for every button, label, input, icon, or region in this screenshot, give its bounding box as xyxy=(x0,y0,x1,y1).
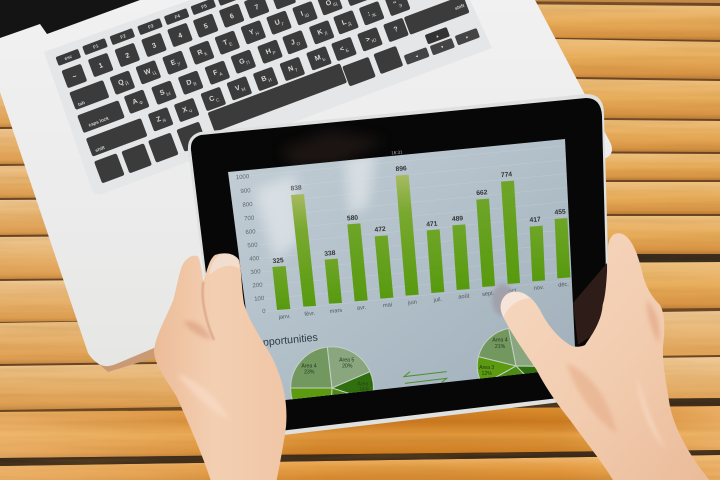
tablet xyxy=(188,94,612,442)
keyboard keys: Й xyxy=(124,79,130,86)
grid lines xyxy=(233,145,573,312)
keyboard keys: Т xyxy=(294,67,299,73)
keyboard keys: G xyxy=(238,58,246,66)
screen reflections xyxy=(255,150,375,260)
y axis labels: 700 xyxy=(244,216,255,222)
keyboard keys: F1 xyxy=(92,43,100,50)
right bezel reflection xyxy=(573,263,608,345)
y axis labels: 400 xyxy=(249,256,260,263)
bar values: 896 xyxy=(395,165,407,173)
keyboard keys: Е xyxy=(229,41,233,47)
keyboard keys: R xyxy=(197,49,204,57)
pie labels right: 21% xyxy=(495,344,506,350)
keyboard well xyxy=(44,0,492,194)
month labels xyxy=(278,282,570,321)
keyboard keys: Ж xyxy=(371,12,377,18)
keyboard keys: T xyxy=(222,39,229,47)
hand shape xyxy=(154,253,286,480)
month labels: déc. xyxy=(558,282,570,289)
keyboard keys: Y xyxy=(248,29,255,37)
pie charts and arrows xyxy=(290,328,538,400)
keyboard keys: F2 xyxy=(120,33,127,40)
keyboard keys: ▴ xyxy=(435,33,440,39)
y axis labels xyxy=(236,174,266,315)
keyboard keys: C xyxy=(208,95,215,104)
keyboard keys: D xyxy=(186,79,193,87)
keyboard keys: А xyxy=(219,71,224,77)
keyboard keys: A xyxy=(132,98,139,106)
keyboard keys: H xyxy=(265,48,272,56)
laptop xyxy=(0,0,612,372)
month labels: juil. xyxy=(432,297,443,304)
keyboard keys: К xyxy=(204,51,208,57)
tablet screen xyxy=(228,139,576,403)
keyboard keys: 3 xyxy=(151,42,158,50)
screen content xyxy=(234,146,572,400)
keyboard keys: Ы xyxy=(166,91,171,97)
y axis labels: 100 xyxy=(254,296,265,303)
bezel reflection xyxy=(286,131,374,166)
keyboard keys: F3 xyxy=(147,23,155,30)
pie labels right: 12% xyxy=(482,371,492,377)
keyboard keys: shift xyxy=(454,3,465,11)
keyboard keys: I xyxy=(300,11,304,18)
keyboard keys: N xyxy=(287,65,294,74)
keyboard keys: ◂ xyxy=(415,53,419,59)
keyboard keys: Ф xyxy=(139,100,144,106)
keyboard keys: > xyxy=(365,36,371,44)
month labels: mars xyxy=(329,308,343,315)
keyboard keys: Р xyxy=(272,50,277,56)
vein highlight xyxy=(637,377,667,450)
y axis labels: 900 xyxy=(240,188,251,195)
keyboard keys: В xyxy=(193,81,197,87)
keyboard keys: 4 xyxy=(177,32,184,40)
wrist highlight xyxy=(177,373,230,420)
bar values: 325 xyxy=(272,257,284,265)
bar chart xyxy=(233,145,573,350)
right hand xyxy=(501,233,710,480)
keyboard keys: shift xyxy=(94,145,106,153)
bar values: 472 xyxy=(374,226,386,234)
knuckle shadow xyxy=(183,321,212,340)
keyboard keys: ▸ xyxy=(465,34,470,40)
keyboard keys: F5 xyxy=(201,3,208,10)
bar values: 774 xyxy=(501,171,513,179)
keyboard keys: : xyxy=(367,10,371,18)
month labels: févr. xyxy=(304,311,316,318)
y axis labels: 600 xyxy=(245,229,256,236)
bar values: 580 xyxy=(347,215,359,222)
month labels: juin xyxy=(407,300,417,307)
fingernail xyxy=(209,253,239,275)
month labels: avr. xyxy=(357,305,367,312)
pie labels left xyxy=(301,358,373,393)
keyboard keys: Z xyxy=(156,116,162,124)
finger crease xyxy=(203,282,214,340)
keyboard keys: J xyxy=(290,39,296,47)
keyboard keys: И xyxy=(268,77,272,83)
keyboard keys: С xyxy=(215,97,221,103)
pie labels left: 14% xyxy=(359,387,370,393)
bar values: 455 xyxy=(554,209,566,216)
pie labels left: 20% xyxy=(342,364,353,370)
keyboard keys: О xyxy=(296,41,301,47)
keyboard keys: ? xyxy=(393,26,399,34)
bar values: 338 xyxy=(324,250,336,258)
pie labels left: Area 4 xyxy=(301,364,317,370)
keyboard keys: U xyxy=(274,19,281,27)
bar values: 662 xyxy=(476,189,488,197)
screen hinge xyxy=(0,0,140,38)
y axis labels: 0 xyxy=(262,309,266,315)
keyboard keys: F xyxy=(212,69,219,77)
keyboard keys: 1 xyxy=(98,62,104,70)
keyboard keys: F4 xyxy=(174,13,181,20)
fingernail xyxy=(501,292,529,317)
keyboard keys: У xyxy=(177,61,181,67)
y axis labels: 300 xyxy=(250,269,261,276)
left hand xyxy=(154,253,286,480)
keyboard keys: 6 xyxy=(229,13,235,21)
month labels: oct. xyxy=(508,288,518,295)
keyboard keys: Д xyxy=(347,20,353,27)
keyboard keys: Б xyxy=(345,48,350,53)
month labels: mai xyxy=(383,302,392,309)
keyboard keys: Э xyxy=(398,2,403,9)
month labels: janv. xyxy=(278,314,291,321)
pie labels left: Area 1 xyxy=(357,381,373,387)
y axis labels: 200 xyxy=(252,283,263,289)
hand shape xyxy=(501,233,710,480)
keyboard keys: S xyxy=(159,89,166,97)
finger ghost reflection xyxy=(492,284,514,316)
keyboard keys: 2 xyxy=(125,52,131,60)
keyboard keys: 7 xyxy=(254,4,260,12)
tablet clock: 16:31 xyxy=(391,149,403,155)
pie labels left: Area 5 xyxy=(339,358,354,364)
keyboard keys: W xyxy=(143,68,152,77)
month labels: sept. xyxy=(482,291,495,298)
y axis labels: 800 xyxy=(242,202,253,209)
keyboard keys: L xyxy=(341,19,347,27)
y axis labels: 500 xyxy=(247,243,258,249)
tablet black bezel xyxy=(191,98,609,438)
keyboard keys: Ч xyxy=(188,108,193,114)
laptop underside shadow xyxy=(92,348,160,372)
keyboard keys: V xyxy=(234,85,241,93)
bar values: 417 xyxy=(529,216,541,224)
keyboard keys: Л xyxy=(324,31,328,36)
laptop body xyxy=(0,0,612,366)
keyboard keys: Ц xyxy=(152,70,157,76)
swap arrows xyxy=(404,372,447,383)
tablet silver frame xyxy=(188,94,612,442)
keyboard keys xyxy=(55,0,480,183)
pie labels left: 23% xyxy=(304,370,315,376)
keyboard keys: Ь xyxy=(322,56,326,62)
keyboard keys: М xyxy=(241,86,246,92)
bar values: 489 xyxy=(452,215,464,223)
keyboard keys: X xyxy=(182,106,188,115)
keyboard keys: E xyxy=(170,59,177,67)
month labels: août xyxy=(458,293,470,301)
keyboard keys: Ю xyxy=(371,37,377,44)
keyboard keys: ▾ xyxy=(440,44,445,50)
keyboard keys: tab xyxy=(77,100,86,107)
bar values: 838 xyxy=(290,185,302,192)
keyboard keys: Н xyxy=(255,31,260,36)
keyboard keys: Ш xyxy=(304,12,310,18)
pie labels right: Area 3 xyxy=(479,365,494,371)
bar values: 471 xyxy=(426,221,438,228)
y axis labels: 1000 xyxy=(236,174,250,181)
bar values xyxy=(272,165,566,265)
pie chart left xyxy=(290,346,374,400)
keyboard keys: Щ xyxy=(332,1,339,7)
pie labels right: Area 4 xyxy=(492,338,508,344)
heading: opportunities: Opportunities xyxy=(254,332,318,350)
keyboard keys: < xyxy=(339,46,345,54)
keyboard keys: " xyxy=(393,1,398,9)
keyboard keys: M xyxy=(314,54,322,63)
keyboard keys: caps lock xyxy=(88,115,110,128)
keyboard keys: 5 xyxy=(203,23,209,31)
bars xyxy=(272,175,570,310)
pie labels right xyxy=(479,338,508,377)
month labels: nov. xyxy=(533,285,545,292)
keyboard keys: Г xyxy=(281,21,285,27)
keyboard keys: esc xyxy=(64,54,73,61)
pie chart right xyxy=(476,328,538,379)
keyboard keys: K xyxy=(317,29,324,37)
keyboard keys: Q xyxy=(117,79,125,87)
keyboard keys: Я xyxy=(162,118,167,124)
keyboard keys: П xyxy=(246,60,251,65)
keyboard keys: B xyxy=(261,75,268,84)
keyboard keys: ~ xyxy=(72,73,78,81)
hand shading xyxy=(567,363,617,433)
thumb knuckle shading xyxy=(647,300,659,343)
